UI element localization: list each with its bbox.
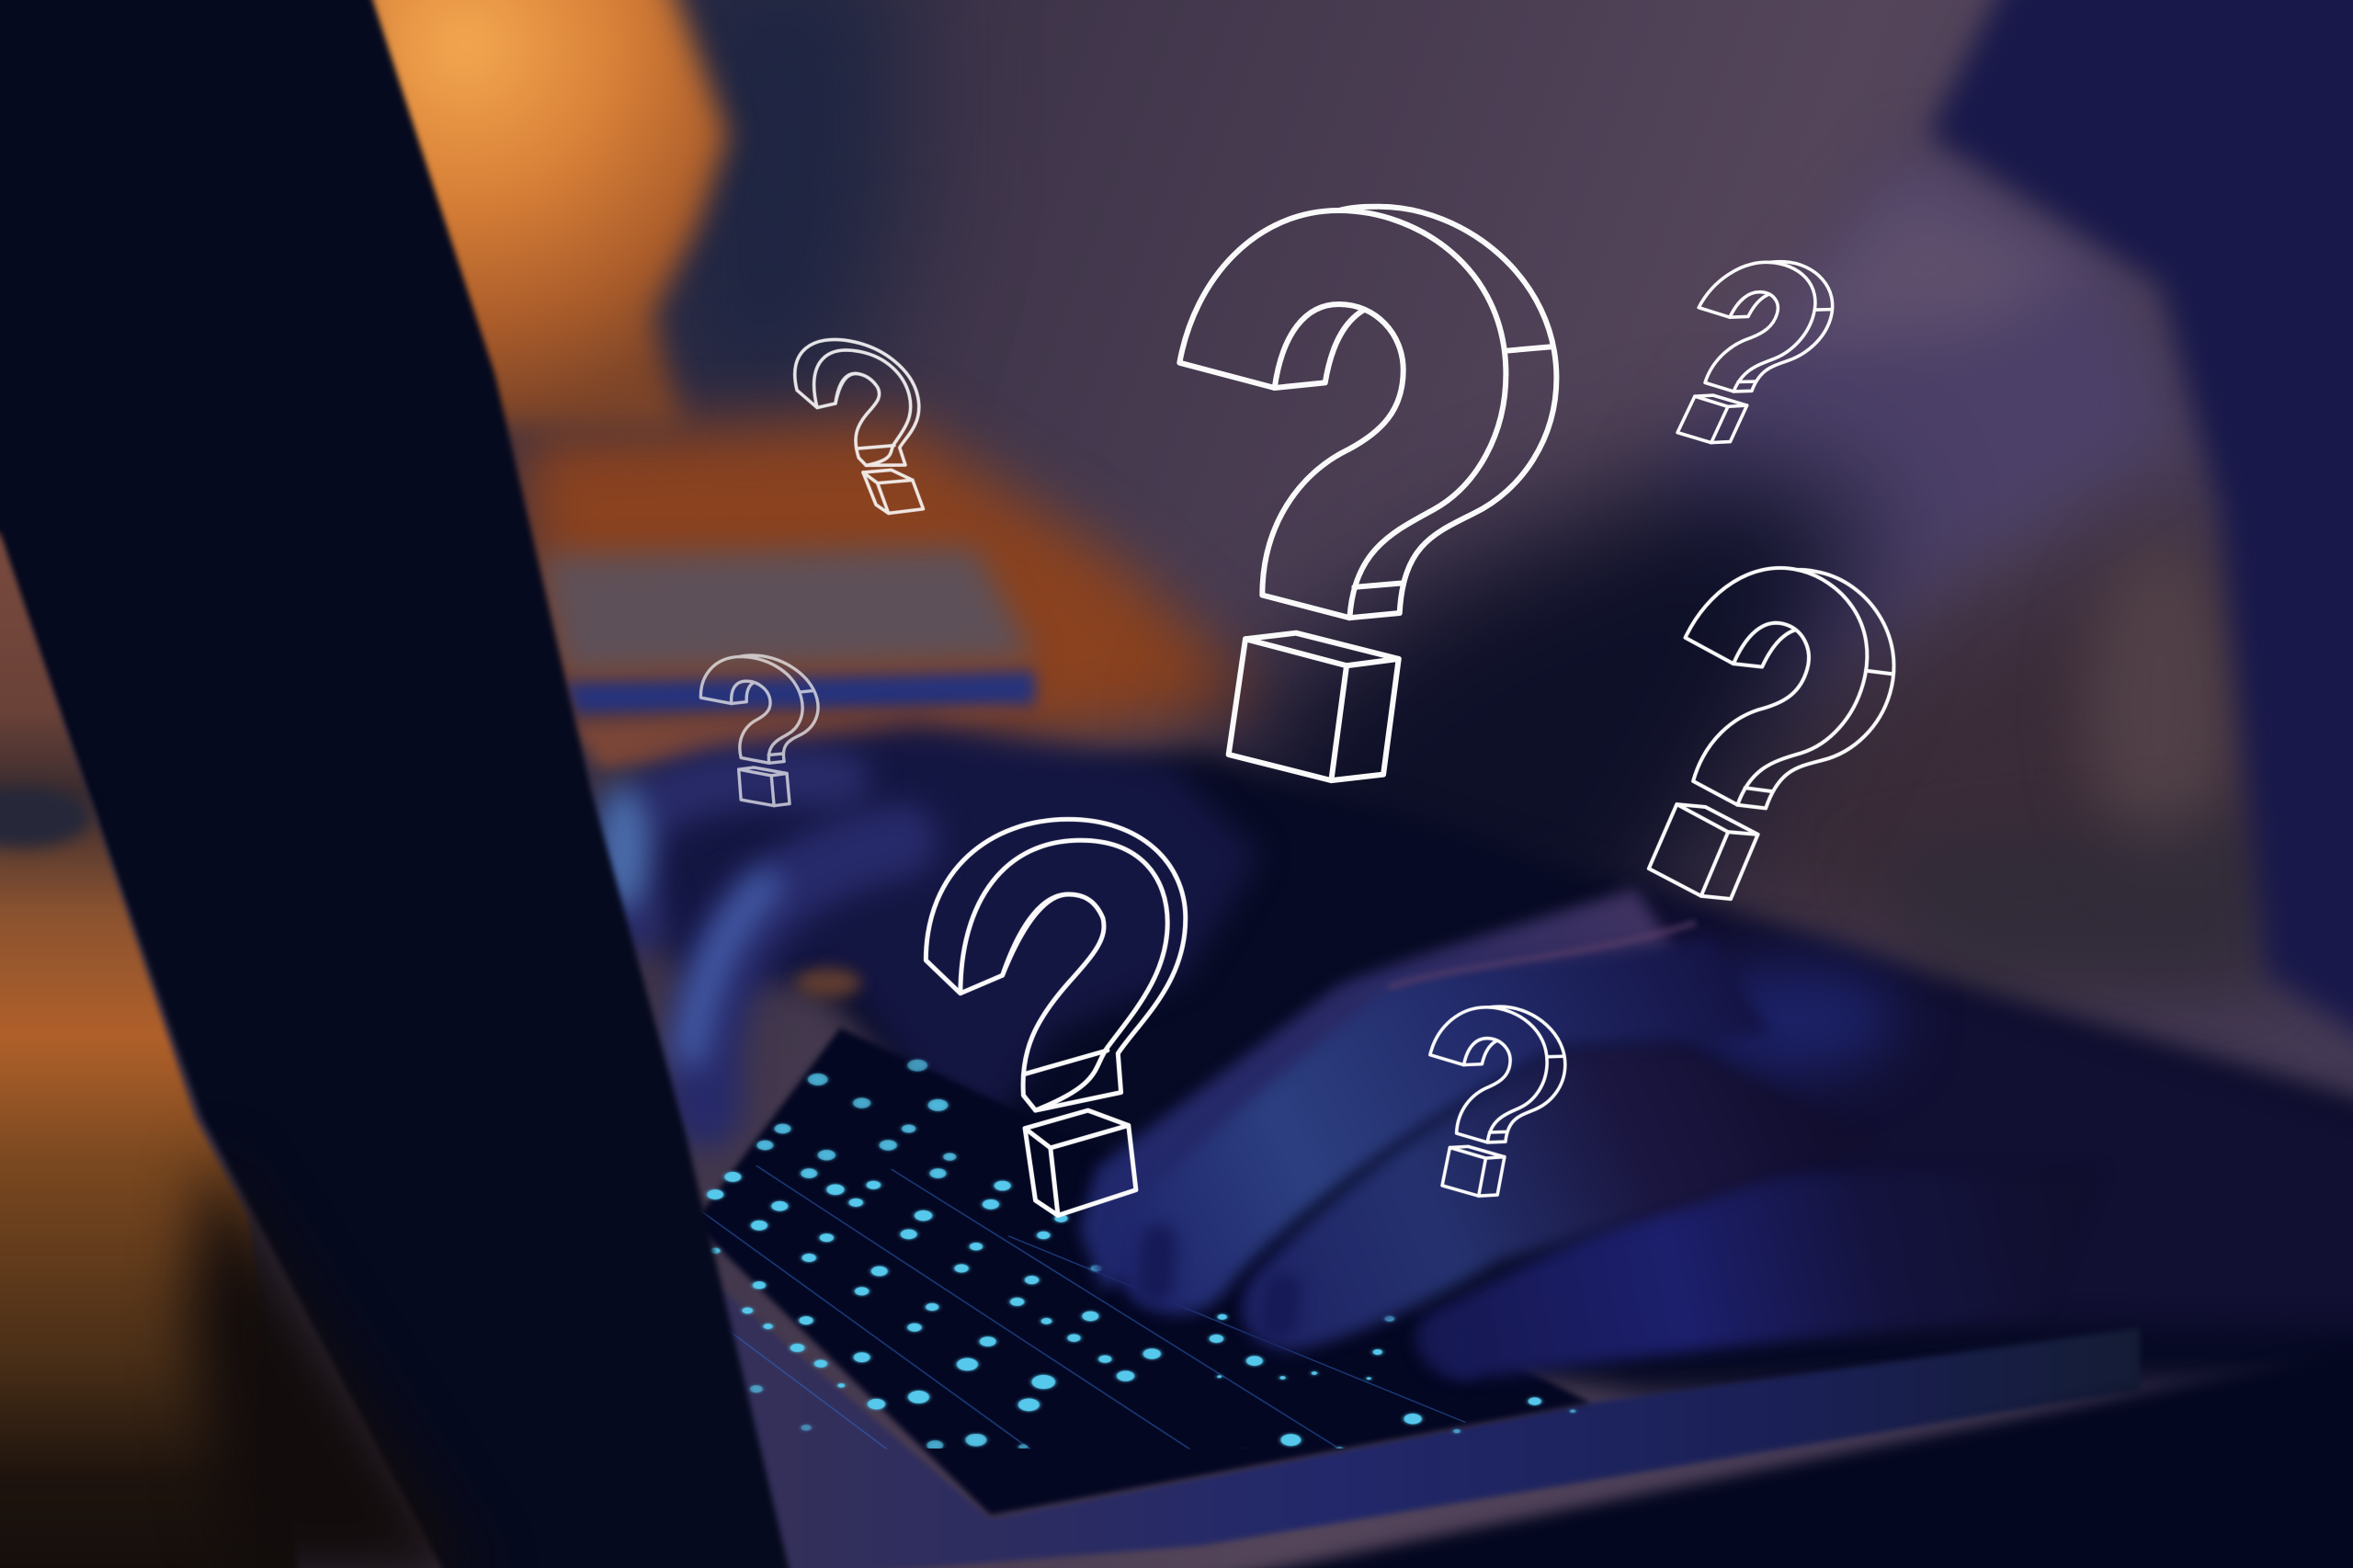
top left question mark (781, 328, 949, 525)
left hand palm (593, 723, 1260, 1155)
table surface (0, 533, 301, 1568)
laptop base (705, 1276, 2140, 1568)
lower centre question mark (926, 819, 1186, 1215)
left hand (593, 723, 1260, 1155)
blue light on finger (690, 885, 766, 1051)
middle finger (1114, 937, 1771, 1314)
shadow beneath laptop on table (188, 1155, 480, 1568)
bottom right question mark (1425, 1003, 1567, 1200)
keyboard well (693, 1028, 1591, 1516)
sleeve in dark blue (1928, 0, 2353, 1051)
little finger (1415, 1170, 2101, 1380)
dark forearm and wrist (1231, 465, 1876, 990)
blue light on knuckle finger (597, 785, 648, 911)
table foreground (1170, 1343, 2353, 1568)
left faded question mark (690, 653, 843, 807)
blurred dark shade behind head (660, 0, 901, 420)
middle right question mark (1618, 548, 1918, 924)
right hand back (1628, 892, 2353, 1328)
keyboard gaps and key backlight (692, 1165, 1465, 1496)
blurred desk in orange light (517, 420, 1276, 735)
left hand finger (704, 840, 901, 1110)
orange reflection between fingers (795, 968, 861, 998)
wooden table on the left (0, 533, 480, 1568)
index finger (1079, 888, 1681, 1290)
blurred head lit by orange light (346, 0, 728, 427)
ring finger (1242, 1035, 1876, 1350)
large question mark (1179, 207, 1556, 780)
orange desk strip under keyboard (570, 711, 1020, 768)
warm reflection along knuckle crease (1388, 923, 1696, 987)
forearm in mauve light (1651, 150, 2176, 705)
lighter wall patch right of the arm (2086, 540, 2236, 870)
keyboard glowing key legends (707, 1060, 1575, 1495)
laptop screen silhouette (0, 0, 792, 1568)
left hand knuckle finger (627, 777, 840, 923)
blurred external keyboard (540, 548, 1036, 676)
blurred blue stripe of external keyboard (563, 671, 1036, 714)
blurred lower right room (1696, 510, 2296, 975)
blue light on back of hand (1688, 966, 1898, 1074)
right hand fingers (1079, 888, 2101, 1380)
lit edge of forearm (1771, 180, 2086, 345)
grey patch above right hand (1860, 811, 2266, 990)
dark mass under both hands (645, 750, 2353, 1395)
dark blurred object on table (0, 788, 90, 847)
top right question mark (1657, 258, 1847, 447)
nail shadows (1155, 1243, 1463, 1357)
